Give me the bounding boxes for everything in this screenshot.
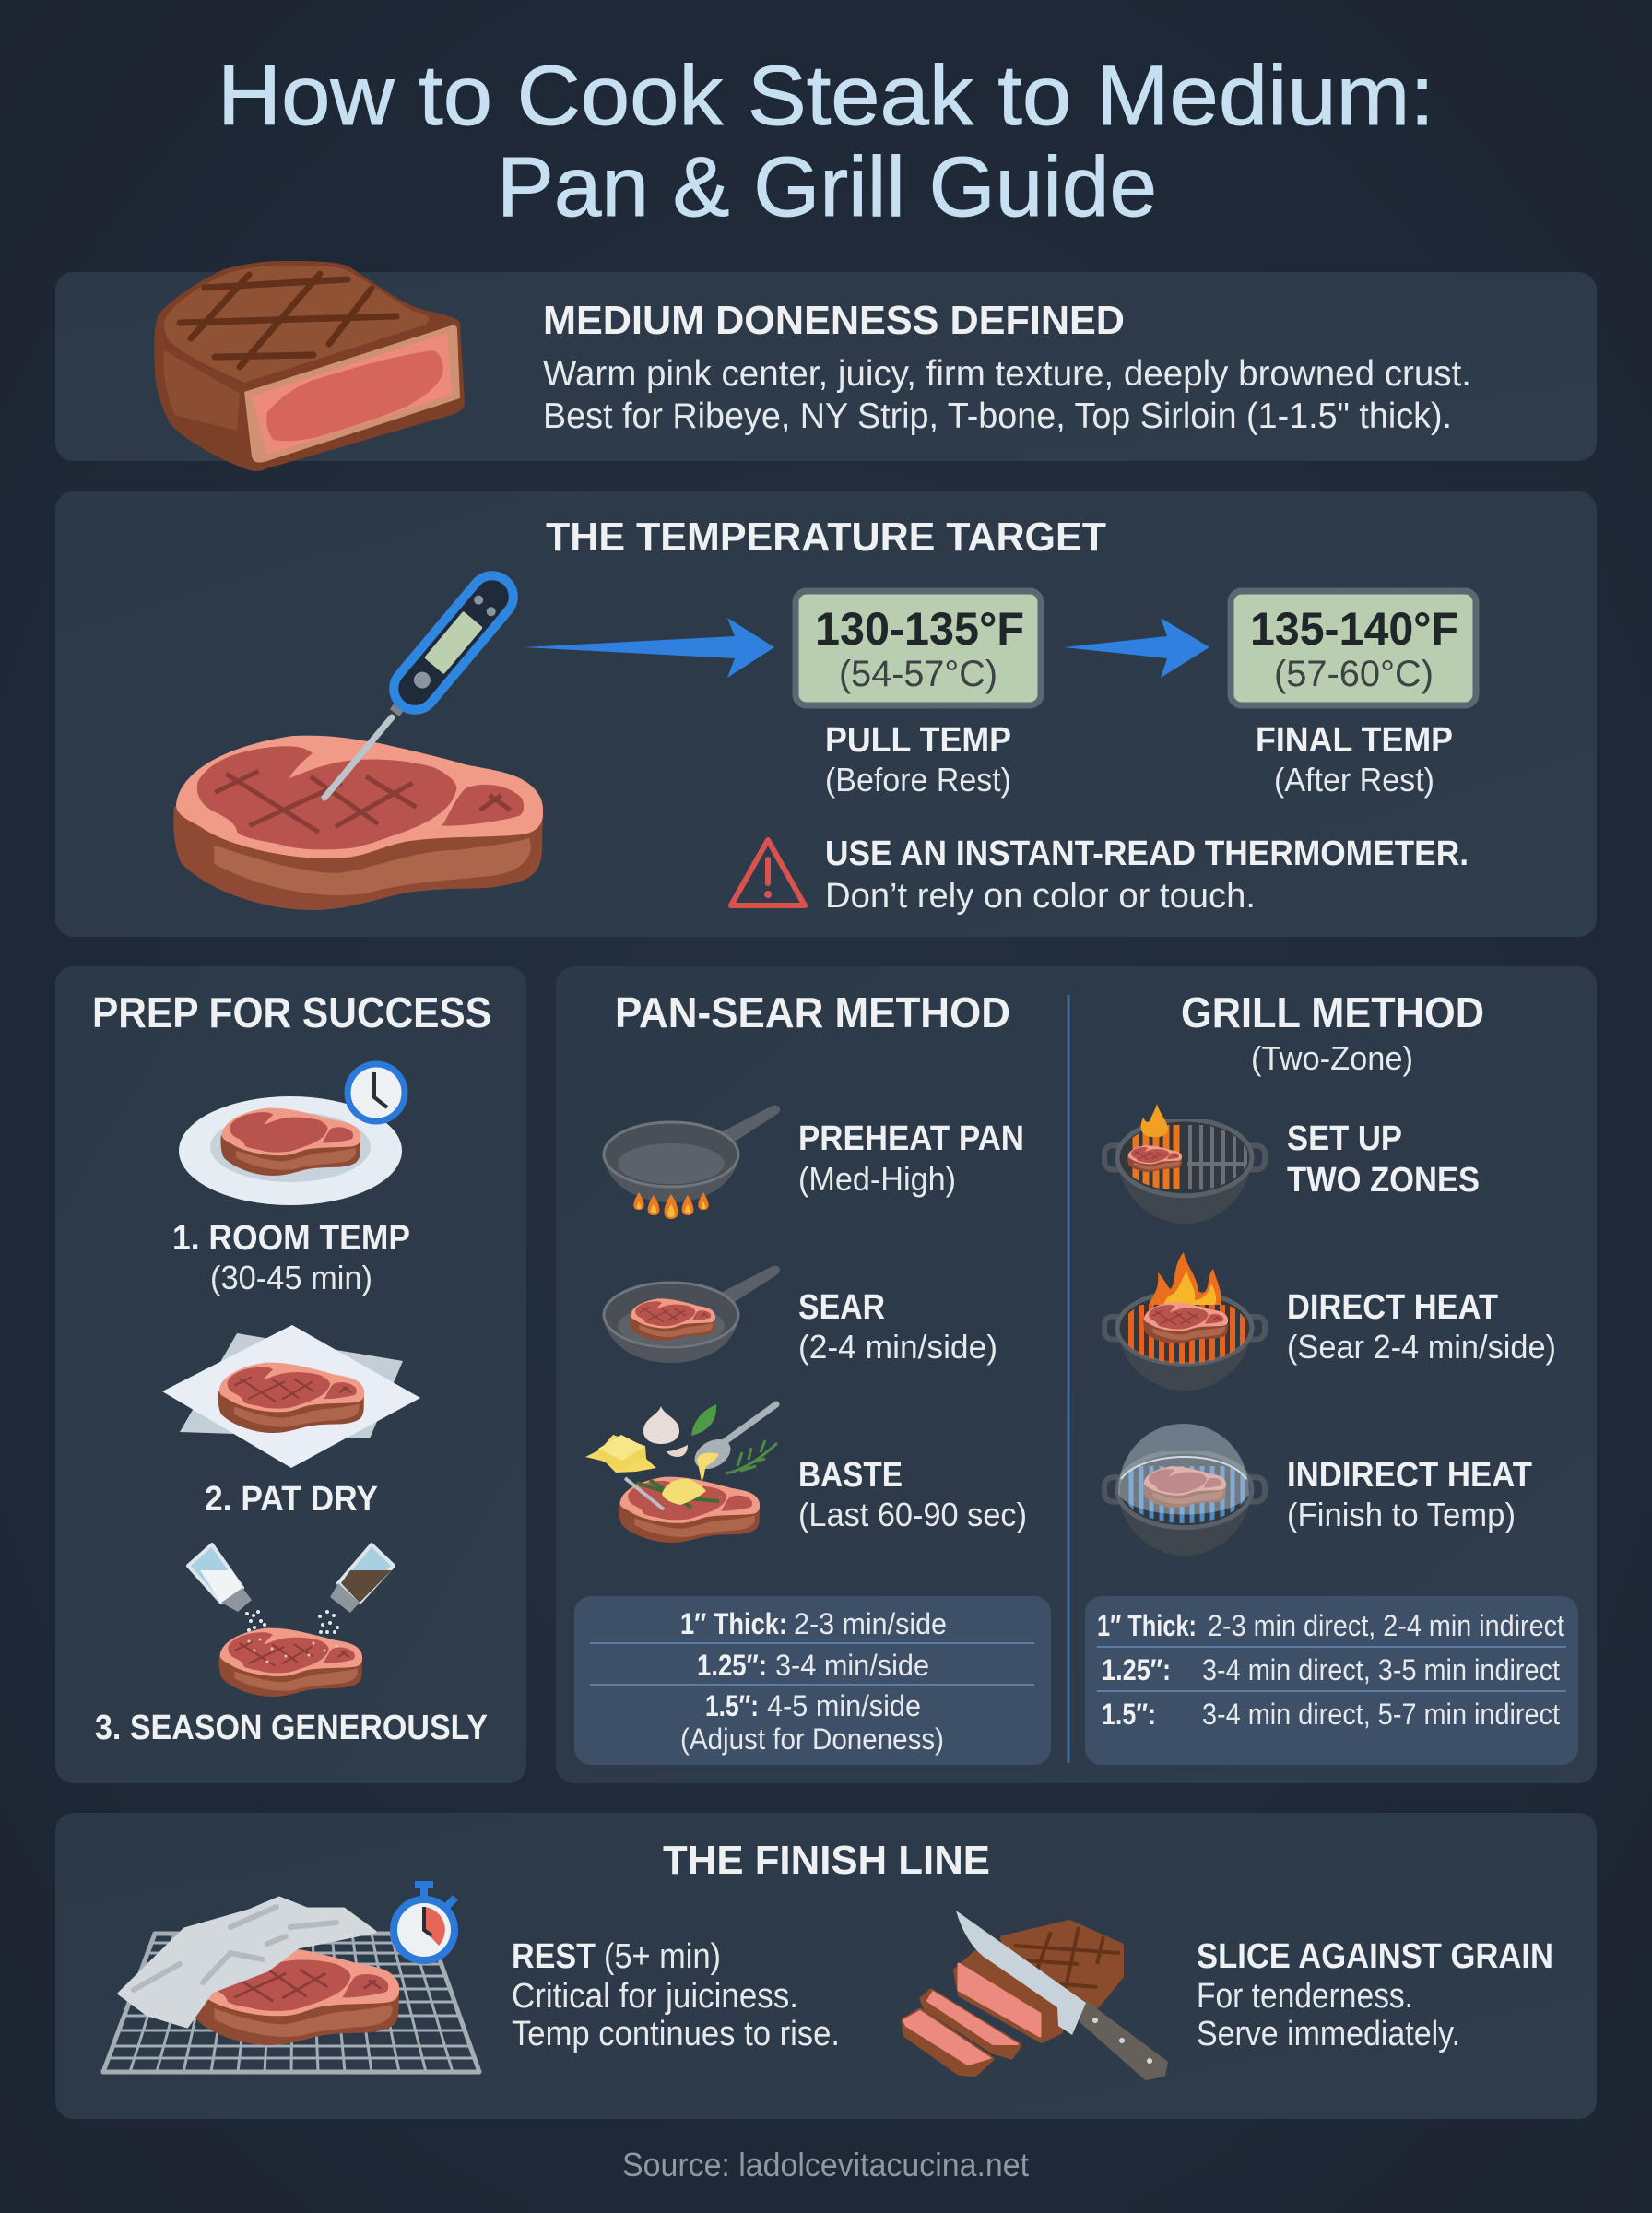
- heading: MEDIUM DONENESS DEFINED: [543, 298, 1125, 343]
- table: pan timings: [574, 1596, 1051, 1765]
- rest text: [512, 1937, 840, 2053]
- label: preheat pan: (Med-High): [798, 1160, 956, 1198]
- readout: pull temp: (54-57°C): [839, 654, 997, 694]
- panel: prep for success: [55, 966, 526, 1783]
- step 1 label: [172, 1219, 410, 1296]
- arrow: to final temp: [1064, 618, 1210, 678]
- label: sear: [798, 1288, 997, 1366]
- rest text: (5+ min): [604, 1937, 721, 1976]
- table: pan timings: 4-5 min/side: [767, 1689, 921, 1722]
- table: grill timings: 3-4 min direct, 3-5 min indirect: [1202, 1653, 1560, 1686]
- panel: medium doneness defined: [55, 261, 1597, 471]
- table: grill timings: 3-4 min direct, 5-7 min indirect: [1202, 1698, 1560, 1731]
- label: baste: (Last 60-90 sec): [798, 1496, 1027, 1533]
- label: preheat pan: PREHEAT PAN: [798, 1119, 1024, 1158]
- label: set up two zones: SET UP: [1287, 1119, 1402, 1158]
- rest text: Temp continues to rise.: [512, 2015, 840, 2053]
- icon: grill indirect heat with lid: [1104, 1424, 1265, 1556]
- icon: steak: [173, 736, 543, 910]
- label: pull temp: (Before Rest): [825, 761, 1011, 799]
- label: set up two zones: [1287, 1119, 1480, 1200]
- warning text: USE AN INSTANT-READ THERMOMETER.: [825, 834, 1469, 873]
- slice text: Serve immediately.: [1197, 2015, 1460, 2053]
- icon: sliced steak with knife: [903, 1911, 1166, 2078]
- label: final temp: (After Rest): [1274, 761, 1434, 799]
- heading: pan-sear: PAN-SEAR METHOD: [615, 988, 1010, 1036]
- icon: steak on plate with clock: [179, 1064, 405, 1205]
- warning text: [825, 834, 1469, 916]
- heading: THE FINISH LINE: [663, 1838, 990, 1883]
- title: [218, 49, 1434, 234]
- readout: pull temp: 130-135°F: [815, 603, 1024, 655]
- step 1 label: (30-45 min): [210, 1259, 372, 1296]
- heading: PREP FOR SUCCESS: [92, 988, 491, 1036]
- title: How to Cook Steak to Medium:: [218, 49, 1434, 143]
- rest text: Critical for juiciness.: [512, 1977, 798, 2016]
- step 3 label: 3. SEASON GENEROUSLY: [95, 1709, 488, 1747]
- icon: preheating pan: [603, 1106, 780, 1219]
- readout: final temp: [1231, 591, 1476, 705]
- label: final temp: [1256, 721, 1453, 799]
- step 2 label: 2. PAT DRY: [205, 1480, 378, 1519]
- table: grill timings: 2-3 min direct, 2-4 min indirect: [1208, 1609, 1564, 1642]
- title: Pan & Grill Guide: [497, 140, 1157, 234]
- description: Best for Ribeye, NY Strip, T-bone, Top Sirloin (1-1.5" thick).: [543, 396, 1452, 436]
- icon: steak on paper towels: [162, 1325, 420, 1468]
- warning text: Don’t rely on color or touch.: [825, 877, 1256, 916]
- label: pull temp: [825, 721, 1011, 799]
- heading: grill: [1181, 988, 1484, 1077]
- heading: grill: (Two-Zone): [1251, 1039, 1413, 1077]
- table: pan timings: (Adjust for Doneness): [680, 1722, 944, 1756]
- label: pull temp: PULL TEMP: [825, 721, 1011, 760]
- heading: grill: GRILL METHOD: [1181, 988, 1484, 1036]
- label: sear: SEAR: [798, 1288, 885, 1327]
- label: baste: BASTE: [798, 1456, 903, 1495]
- label: final temp: FINAL TEMP: [1256, 721, 1453, 760]
- label: indirect heat: (Finish to Temp): [1287, 1496, 1516, 1533]
- label: direct heat: (Sear 2-4 min/side): [1287, 1328, 1556, 1366]
- table: grill timings: 1.25″:: [1102, 1653, 1171, 1686]
- description: [543, 354, 1471, 436]
- table: pan timings: 2-3 min/side: [794, 1607, 947, 1640]
- readout: final temp: (57-60°C): [1274, 654, 1434, 694]
- slice text: For tenderness.: [1197, 1977, 1413, 2016]
- table: grill timings: 1.5″:: [1102, 1698, 1156, 1731]
- icon: basting with butter and herbs: [585, 1404, 777, 1543]
- icon: grill two zones: [1104, 1104, 1265, 1224]
- source line: Source: ladolcevitacucina.net: [622, 2146, 1029, 2183]
- label: preheat pan: [798, 1119, 1024, 1198]
- description: Warm pink center, juicy, firm texture, deeply browned crust.: [543, 354, 1471, 394]
- label: set up two zones: TWO ZONES: [1287, 1161, 1480, 1200]
- icon: warning triangle: [731, 840, 805, 905]
- icon: resting steak on rack with foil and timer: [103, 1885, 479, 2072]
- slice text: SLICE AGAINST GRAIN: [1197, 1937, 1553, 1976]
- table: pan timings: 1.25″:: [697, 1649, 767, 1682]
- icon: grill direct heat: [1104, 1252, 1265, 1391]
- heading: THE TEMPERATURE TARGET: [546, 515, 1106, 560]
- icon: cut steak: [154, 261, 465, 471]
- readout: pull temp: [796, 591, 1041, 705]
- arrow: to pull temp: [524, 618, 774, 678]
- panel: cooking methods: [556, 966, 1597, 1783]
- table: pan timings: 1″ Thick:: [680, 1607, 787, 1640]
- icon: salt and pepper seasoning: [188, 1544, 394, 1697]
- label: baste: [798, 1456, 1027, 1533]
- label: direct heat: DIRECT HEAT: [1287, 1288, 1498, 1327]
- table: pan timings: 3-4 min/side: [775, 1649, 929, 1682]
- label: indirect heat: [1287, 1456, 1532, 1533]
- icon: searing steak in pan: [603, 1266, 780, 1363]
- slice text: [1197, 1937, 1553, 2053]
- table: pan timings: 1.5″:: [705, 1689, 759, 1722]
- panel: finish line: [55, 1813, 1597, 2119]
- readout: final temp: 135-140°F: [1250, 603, 1458, 655]
- label: sear: (2-4 min/side): [798, 1328, 997, 1366]
- table: grill timings: [1085, 1596, 1578, 1765]
- icon: instant-read thermometer: [324, 567, 522, 798]
- rest text: REST: [512, 1937, 596, 1976]
- label: direct heat: [1287, 1288, 1556, 1366]
- panel: temperature target: [55, 491, 1597, 937]
- step 1 label: 1. ROOM TEMP: [172, 1219, 410, 1258]
- table: grill timings: 1″ Thick:: [1097, 1609, 1197, 1642]
- label: indirect heat: INDIRECT HEAT: [1287, 1456, 1532, 1495]
